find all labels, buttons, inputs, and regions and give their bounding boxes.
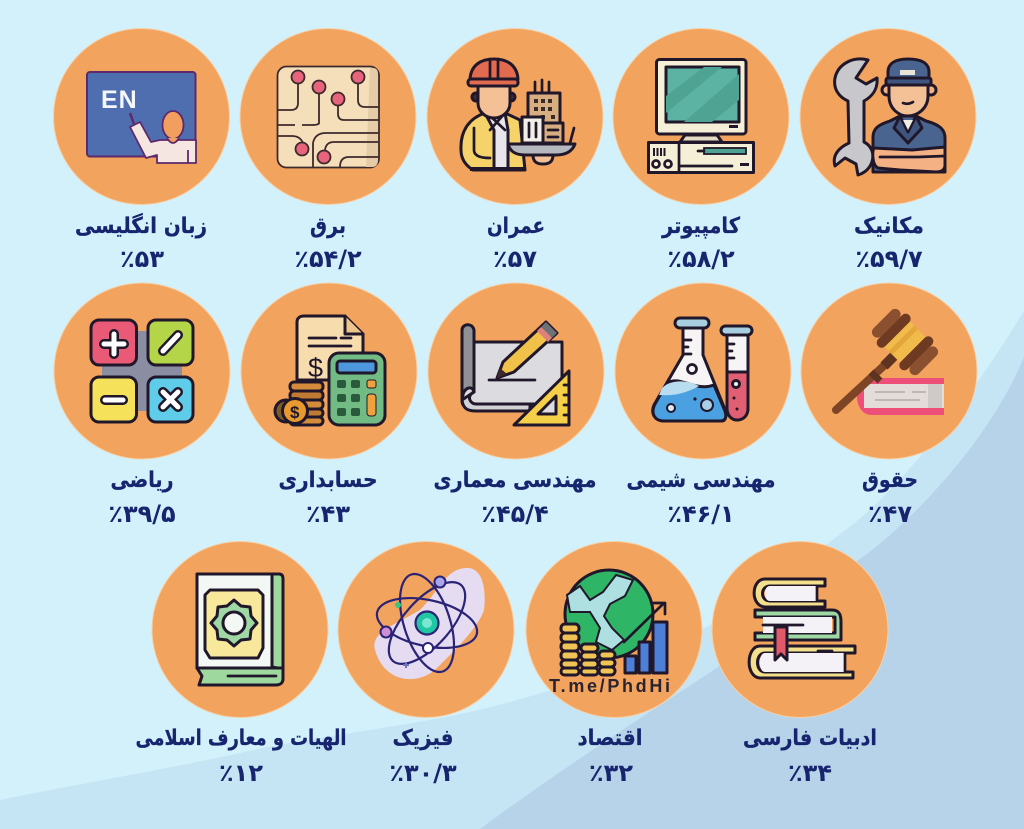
card: electrical — [240, 28, 416, 273]
card: Persian literature — [712, 542, 888, 787]
label: مکانیک — [854, 214, 924, 239]
percent: ٪۳۴ — [788, 759, 832, 787]
icon: invoice, calculator and coins: $ — [308, 353, 323, 383]
card: computer — [613, 28, 789, 273]
percent: ٪۴۵/۴ — [481, 500, 549, 528]
card: mechanic — [800, 28, 976, 273]
circle — [615, 283, 791, 459]
percent: ٪۳۹/۵ — [108, 500, 176, 528]
circle — [241, 283, 417, 459]
icon: desktop computer — [648, 60, 754, 172]
icon: blueprint, pencil and set square — [462, 322, 569, 425]
icon: teacher at blackboard — [87, 72, 196, 163]
label: مهندسی معماری — [434, 468, 596, 493]
label: مهندسی شیمی — [626, 468, 776, 493]
label: حسابداری — [278, 468, 378, 493]
icon: gavel and book — [836, 304, 944, 415]
card: law — [801, 283, 977, 528]
icon: mechanic with wrench — [834, 59, 945, 175]
circle — [54, 283, 230, 459]
label: برق — [310, 214, 346, 239]
label: الهیات و معارف اسلامی — [136, 726, 346, 751]
circle — [428, 283, 604, 459]
label: اقتصاد — [578, 726, 642, 751]
circle — [526, 542, 702, 718]
label: کامپیوتر — [661, 214, 740, 239]
icon: invoice, calculator and coins: $ — [290, 403, 300, 422]
circle — [152, 542, 328, 718]
icon: four math operators — [91, 320, 193, 422]
icon: globe, coins and growth chart: T.me/PhdHi — [549, 676, 670, 696]
card: mathematics — [54, 283, 230, 528]
icon: circuit board — [278, 66, 379, 168]
label: ادبیات فارسی — [743, 726, 877, 751]
circle — [800, 28, 976, 204]
percent: ٪۵۷ — [493, 245, 537, 273]
percent: ٪۵۴/۲ — [294, 245, 362, 273]
label: فیزیک — [392, 726, 454, 751]
card: physics — [338, 542, 514, 787]
icon: stack of books — [749, 579, 855, 678]
circle — [613, 28, 789, 204]
icon: atom — [372, 567, 485, 679]
icon: lab flask and test tube — [653, 318, 752, 421]
card: chemical engineering — [615, 283, 791, 528]
percent: ٪۴۷ — [868, 500, 912, 528]
percent: ٪۵۸/۲ — [667, 245, 735, 273]
icon: invoice, calculator and coins — [275, 316, 385, 425]
percent: ٪۴۶/۱ — [667, 500, 735, 528]
percent: ٪۳۲ — [589, 759, 633, 787]
label: عمران — [487, 214, 545, 239]
percent: ٪۴۳ — [306, 500, 350, 528]
card: theology — [136, 542, 346, 787]
circle — [54, 28, 230, 204]
percent: ٪۵۹/۷ — [855, 245, 923, 273]
card: English — [54, 28, 230, 273]
percent: ٪۱۲ — [219, 759, 263, 787]
icon: globe, coins and growth chart — [549, 570, 670, 696]
card: civil engineering — [427, 28, 603, 273]
icon: civil engineer and buildings — [461, 59, 575, 171]
percent: ٪۳۰/۳ — [389, 759, 457, 787]
card: architecture — [428, 283, 604, 528]
circle — [801, 283, 977, 459]
circle — [712, 542, 888, 718]
circle — [338, 542, 514, 718]
label: زبان انگلیسی — [75, 212, 207, 239]
icon: holy book — [197, 574, 283, 685]
card: accounting — [241, 283, 417, 528]
label: حقوق — [862, 468, 918, 493]
circle — [240, 28, 416, 204]
icon: teacher at blackboard: EN — [101, 86, 138, 114]
circle — [427, 28, 603, 204]
label: ریاضی — [110, 468, 174, 493]
card: economics — [526, 542, 702, 787]
percent: ٪۵۳ — [120, 245, 164, 273]
